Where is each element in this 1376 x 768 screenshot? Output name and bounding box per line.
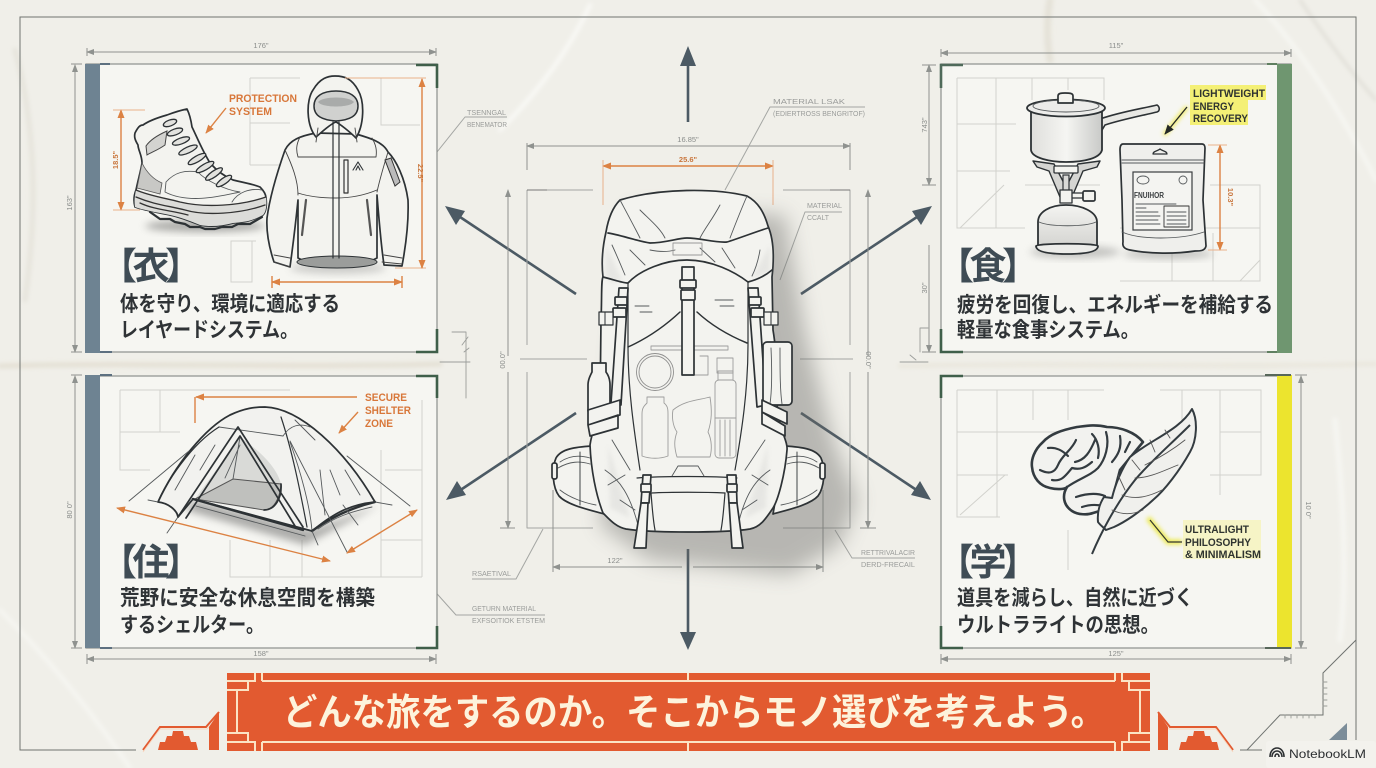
tent ground edge [193, 499, 303, 530]
bottom banner [143, 673, 1233, 752]
text block: food [957, 294, 1273, 342]
background grid [231, 78, 420, 282]
panel dimensions [920, 41, 1291, 352]
panel frame [85, 375, 437, 648]
text block: shelter: 荒野に安全な休息空間を構築 [120, 586, 375, 610]
orange dimensions [117, 397, 417, 561]
backpack front panel [628, 282, 748, 470]
text block: learning: ウルトラライトの思想。 [957, 614, 1159, 637]
backpack lower compartment [605, 440, 770, 548]
panel frame [85, 64, 437, 353]
icon: pot and stove [1027, 93, 1159, 258]
panel dimensions: 115" [1109, 41, 1124, 50]
tent door [195, 437, 281, 510]
tent body [158, 407, 375, 531]
orange dimension: 10.3" [1226, 188, 1235, 207]
callout: ultralight philosophy: & MINIMALISM [1185, 549, 1261, 561]
orange dimensions [111, 78, 426, 288]
icon: boot [134, 109, 266, 232]
leader labels: CCALT [807, 213, 829, 222]
icon: notebook logo [1270, 748, 1284, 757]
blueprint dimensions around backpack: 122" [607, 556, 623, 565]
icon: jacket [267, 76, 408, 274]
orange dimension [1208, 145, 1235, 250]
icon: food pouch [1120, 144, 1213, 259]
panel dimensions [941, 375, 1313, 664]
backpack shading [605, 245, 770, 518]
panel dimensions: 176" [253, 41, 269, 50]
icon: brain [1032, 425, 1143, 514]
callout: secure shelter zone: SECURE [365, 392, 407, 404]
banner side ornaments [143, 712, 1233, 752]
panel: shelter [65, 375, 437, 664]
icon: backpack [552, 190, 858, 575]
panel dimensions: 163" [65, 195, 74, 211]
text block: food: 疲労を回復し、エネルギーを補給する [957, 294, 1273, 317]
arrow: to learning [801, 413, 931, 500]
panel: food [920, 41, 1292, 353]
backpack straps and buckles [599, 267, 778, 407]
panel frame [941, 375, 1292, 648]
boot midsole and outsole [135, 190, 266, 226]
text block: food: 軽量な食事システム。 [957, 318, 1139, 342]
leader labels: TSENNGAL [467, 108, 506, 117]
icon: tent [129, 407, 410, 552]
callout: protection system: PROTECTION [229, 93, 297, 105]
orange dimensions: 22.5" [416, 164, 425, 183]
banner message: どんな旅をするのか。そこからモノ選びを考えよう。 [283, 692, 1105, 733]
panel dimensions [65, 375, 436, 664]
callout: secure shelter zone [339, 392, 411, 433]
text block: clothing: レイヤードシステム。 [120, 319, 298, 342]
callout: lightweight energy recovery [1164, 85, 1266, 135]
NotebookLM badge [1266, 741, 1376, 768]
backpack lid [603, 196, 772, 283]
leader labels: RSAETIVAL [472, 569, 511, 578]
background grid [957, 390, 1261, 570]
blueprint dimensions around backpack [498, 135, 876, 572]
background grid [120, 390, 422, 577]
backpack main outline [590, 190, 787, 532]
callout: lightweight energy recovery: RECOVERY [1193, 113, 1249, 125]
stove [1033, 161, 1100, 254]
callout: ultralight philosophy: ULTRALIGHT [1185, 524, 1249, 536]
callout: protection system [206, 93, 297, 133]
panel dimensions: 30" [920, 282, 929, 294]
leader labels: (EDIERTROSS BENGRITOF) [773, 109, 865, 118]
backpack shadow [600, 210, 858, 575]
blueprint dimensions around backpack: 25.6" [679, 155, 698, 164]
callout: protection system: SYSTEM [229, 106, 272, 118]
banner plate [227, 673, 1150, 751]
blueprint dimensions around backpack: 00.0" [498, 351, 507, 369]
callout: secure shelter zone: SHELTER [365, 405, 411, 417]
leader labels: MATERIAL LSAK [773, 97, 845, 106]
arrow: to shelter [446, 413, 576, 500]
callout: ultralight philosophy [1148, 518, 1261, 561]
panel dimensions: 80 0" [65, 501, 74, 519]
panel dimensions: 125" [1108, 649, 1124, 658]
backpack gear contents [636, 346, 736, 458]
heading: food: 【食】 [937, 246, 1034, 287]
backpack hip belts [552, 446, 825, 514]
heading: learning: 【学】 [937, 542, 1034, 583]
leader labels: MATERIAL [807, 201, 842, 210]
orange dimensions: 18.5" [111, 150, 120, 169]
NotebookLM badge: NotebookLM [1289, 747, 1366, 761]
leader labels: RETTRIVALACIR [861, 548, 915, 557]
panel dimensions [65, 41, 436, 352]
background grid [957, 78, 1260, 281]
arrow: to clothing [445, 206, 576, 294]
text block: shelter [120, 586, 375, 637]
leader labels: BENEMATOR [467, 120, 507, 129]
leader labels: GETURN MATERIAL [472, 604, 536, 613]
pot [1027, 93, 1159, 162]
arrow: to food [801, 206, 932, 294]
leader labels: DERD-FRECAIL [861, 560, 915, 569]
text block: clothing [120, 293, 340, 342]
text block: learning [957, 586, 1193, 637]
callout: lightweight energy recovery: LIGHTWEIGHT [1193, 88, 1265, 100]
icon: food pouch: FNUIHOR [1134, 191, 1164, 200]
blueprint dimensions around backpack: 00.0" [864, 351, 873, 369]
tent poles [158, 417, 307, 527]
panel dimensions: 743" [920, 117, 929, 133]
panel: clothing [65, 41, 437, 353]
blueprint dimensions around backpack: 16.85" [677, 135, 699, 144]
panel frame [941, 64, 1292, 353]
tent guy lines [129, 441, 410, 552]
text block: learning: 道具を減らし、自然に近づく [957, 586, 1193, 610]
heading: shelter: 【住】 [100, 542, 198, 583]
arrow: up [680, 46, 696, 122]
heading: clothing: 【衣】 [100, 246, 198, 287]
leader labels: EXFSOITIOK ETSTEM [472, 616, 545, 625]
banner trim [227, 673, 1150, 751]
text block: shelter: するシェルター。 [120, 614, 264, 637]
leader labels [422, 97, 928, 625]
panel dimensions: 10 0" [1304, 501, 1313, 519]
panel dimensions: 158" [253, 649, 269, 658]
panel: learning [937, 375, 1313, 664]
central arrows [445, 46, 932, 650]
arrow: down [680, 549, 696, 650]
callout: lightweight energy recovery: ENERGY [1193, 101, 1235, 113]
callout: ultralight philosophy: PHILOSOPHY [1185, 537, 1252, 549]
icon: feather [1092, 409, 1196, 554]
text block: clothing: 体を守り、環境に適応する [120, 293, 340, 316]
callout: secure shelter zone: ZONE [365, 418, 393, 430]
backpack side bottle and roll [588, 342, 792, 436]
